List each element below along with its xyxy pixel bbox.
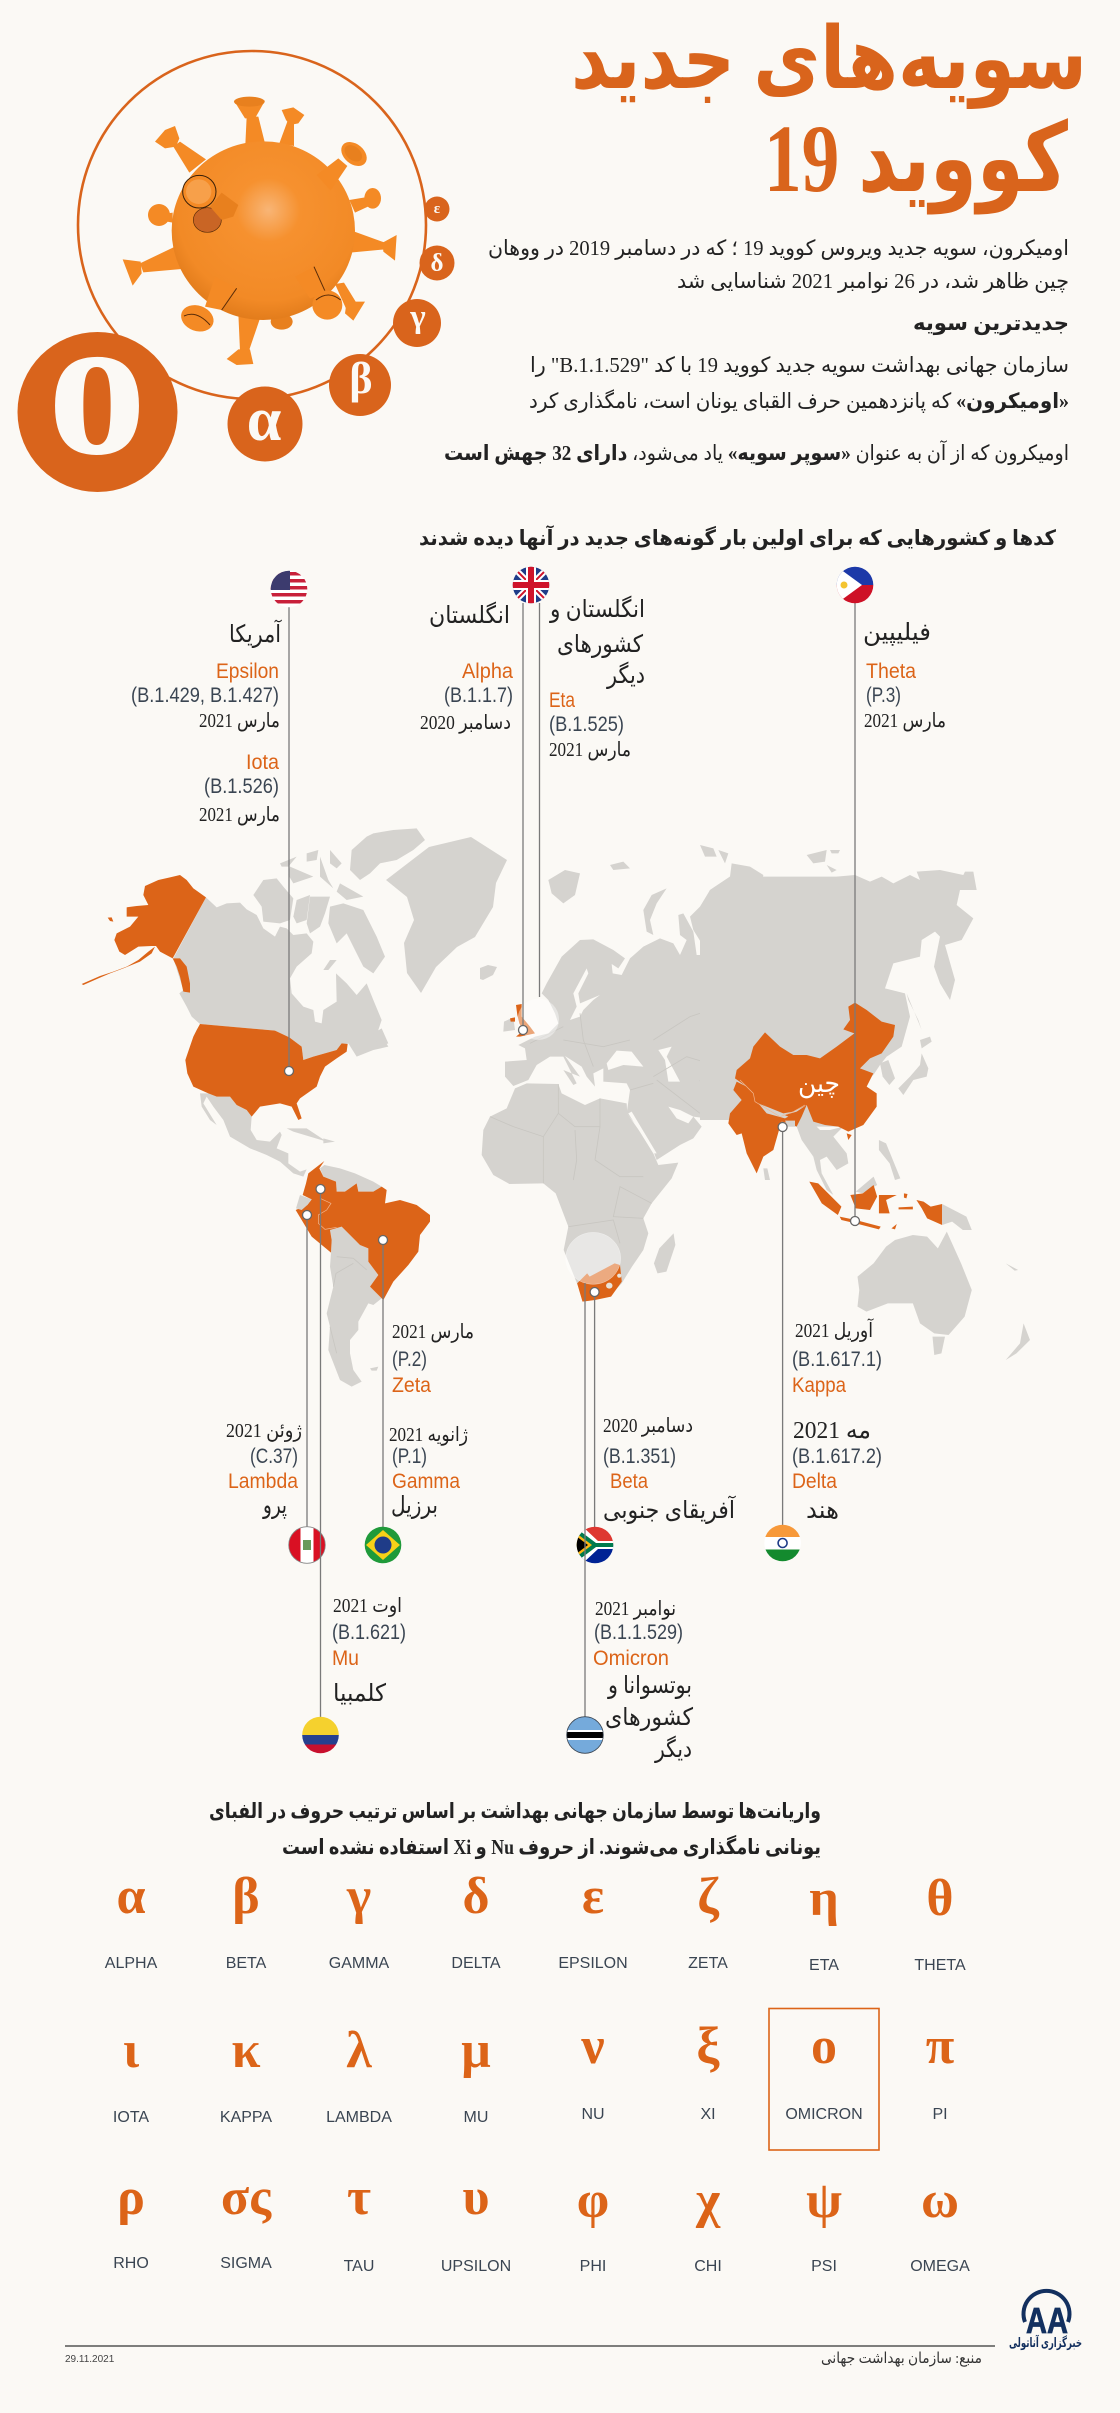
callout: Philippines: (P.3): [866, 684, 901, 707]
row 2 letters: PI: [932, 2106, 948, 2123]
row 1 letters: α: [116, 1868, 146, 1925]
callout: Brazil: ژانویه 2021: [389, 1424, 468, 1446]
intro text block: جدیدترین سویه: [913, 311, 1069, 335]
greek alphabet grid: [105, 1868, 970, 2275]
callout: South Africa: آفریقای جنوبی: [603, 1495, 736, 1524]
row 2 letters: ξ: [696, 2018, 720, 2075]
callout: Botswana: Omicron: [593, 1647, 669, 1670]
row 1 letters: δ: [462, 1868, 490, 1925]
callout: United States: مارس 2021: [199, 710, 280, 732]
callout: Philippines: فیلیپین: [863, 620, 931, 646]
callout: India: هند: [806, 1498, 839, 1524]
callout: India: (B.1.617.1): [792, 1348, 882, 1371]
callout: United States: (B.1.429, B.1.427): [131, 684, 279, 707]
naming note: یونانی نامگذاری می‌شوند. از حروف Nu و Xi استفاده نشده است: [282, 1834, 821, 1859]
callout: Botswana: (B.1.1.529): [594, 1621, 683, 1644]
row 1 letters: DELTA: [451, 1955, 501, 1972]
row 2 letters: ι: [123, 2022, 139, 2079]
footer: منبع: سازمان بهداشت جهانی: [821, 2351, 982, 2367]
title: [571, 11, 1087, 215]
callout: England: Eta: [549, 689, 575, 712]
logo: Anadolu Agency: AA: [1026, 2300, 1068, 2341]
callout: Brazil: برزیل: [391, 1493, 438, 1519]
callout: Brazil: مارس 2021: [392, 1321, 474, 1343]
badge: epsilon: ε: [434, 201, 441, 217]
logo: Anadolu Agency: خبرگزاری آناتولی: [1009, 2334, 1082, 2350]
world map: [82, 828, 1030, 1387]
row 3 letters: ω: [921, 2172, 959, 2229]
row 3 letters: [113, 2169, 970, 2275]
intro text block: چین ظاهر شد، در 26 نوامبر 2021 شناسایی شد: [677, 269, 1069, 293]
row 3 letters: OMEGA: [910, 2258, 970, 2275]
row 2 letters: MU: [464, 2109, 488, 2126]
row 2 letters: ν: [580, 2018, 605, 2075]
map heading: کدها و کشورهایی که برای اولین بار گونه‌های جدید در آنها دیده شدند: [419, 525, 1057, 550]
callout: England: دسامبر 2020: [420, 712, 511, 734]
callout: Botswana: بوتسوانا و: [607, 1673, 692, 1699]
callout: United States: (B.1.526): [204, 775, 279, 798]
badge: beta: β: [349, 354, 373, 403]
flag: Brazil: [364, 1526, 402, 1564]
callout: England: انگلستان: [429, 601, 510, 629]
row 2 letters: ο: [811, 2018, 837, 2075]
callout: United States: مارس 2021: [199, 804, 280, 826]
callout: India: [764, 1122, 882, 1562]
badge: epsilon: [424, 196, 450, 222]
callout: India: (B.1.617.2): [792, 1445, 882, 1468]
callout: Brazil: Zeta: [392, 1374, 431, 1397]
row 3 letters: PSI: [811, 2258, 837, 2275]
callout: South Africa: دسامبر 2020: [603, 1415, 693, 1437]
callout: United States: Iota: [246, 751, 279, 774]
callout: Botswana: دیگر: [654, 1735, 692, 1763]
logo: Anadolu Agency: [1009, 2291, 1082, 2350]
row 1 letters: β: [232, 1868, 260, 1925]
callout: Peru: Lambda: [228, 1470, 298, 1493]
map: Southern Africa, South-East Asia and Oceania: [566, 1140, 1030, 1360]
row 1 letters: θ: [926, 1870, 954, 1927]
callout: India: آوریل 2021: [795, 1317, 874, 1342]
badge: omicron: [18, 272, 178, 498]
callout: Brazil: Gamma: [392, 1470, 460, 1493]
row 3 letters: χ: [695, 2172, 721, 2229]
row 3 letters: υ: [462, 2169, 490, 2226]
row 3 letters: UPSILON: [441, 2258, 511, 2275]
badge: gamma: γ: [409, 299, 426, 335]
row 3 letters: RHO: [113, 2255, 149, 2272]
row 1 letters: ALPHA: [105, 1955, 158, 1972]
callout: England: مارس 2021: [549, 739, 631, 761]
callout: Philippines: مارس 2021: [864, 710, 946, 732]
callout: Brazil: [364, 1236, 474, 1564]
row 2 letters: μ: [461, 2022, 491, 2079]
naming note: [209, 1799, 821, 1859]
callout: Colombia: کلمبیا: [333, 1681, 387, 1707]
footer: 29.11.2021: [65, 2354, 115, 2365]
intro text block: اومیکرون که از آن به عنوان «سوپر سویه» یاد می‌شود، دارای 32 جهش است: [444, 440, 1069, 465]
badge: beta: [329, 354, 391, 416]
row 3 letters: ψ: [806, 2172, 842, 2229]
flag: United Kingdom: [512, 566, 550, 604]
callout: England: Alpha: [462, 660, 513, 683]
callout: United States: آمریکا: [229, 619, 282, 648]
footer: [65, 2346, 995, 2367]
map: India, Nepal and Bangladesh: [728, 1080, 807, 1173]
callout: India: Delta: [792, 1470, 837, 1493]
badge: delta: [420, 246, 454, 280]
map: South America: [296, 1161, 430, 1387]
row 2 letters: λ: [346, 2022, 372, 2079]
flag: India: [764, 1524, 802, 1562]
map: North America: [82, 828, 425, 1177]
badge: gamma: [393, 299, 441, 347]
callout: United States: [131, 570, 308, 1076]
row 2 letters: OMICRON: [785, 2106, 863, 2123]
callout: England: (B.1.1.7): [444, 684, 513, 707]
highlighted omicron box: [769, 2008, 879, 2150]
flag: Botswana: [567, 1717, 603, 1753]
row 3 letters: ρ: [117, 2169, 145, 2226]
callout: England: (B.1.525): [549, 713, 624, 736]
row 3 letters: τ: [347, 2169, 371, 2226]
callout: India: مه 2021: [793, 1418, 871, 1444]
badge: alpha: [228, 386, 302, 462]
callout: Brazil: (P.2): [392, 1348, 427, 1371]
badge: alpha: α: [247, 386, 281, 454]
callout: India: Kappa: [792, 1374, 846, 1397]
callout: Botswana: کشورهای: [605, 1705, 694, 1731]
flag: South Africa: [576, 1526, 614, 1564]
row 3 letters: SIGMA: [220, 2255, 272, 2272]
intro text block: «اومیکرون» که پانزدهمین حرف القبای یونان است، نامگذاری کرد: [529, 389, 1069, 413]
icon: orange virus: [123, 97, 397, 365]
callout: England: [420, 566, 645, 1034]
row 1 letters: ZETA: [688, 1955, 728, 1972]
callout: Philippines: [836, 566, 946, 1226]
intro text block: اومیکرون، سویه جدید ویروس کووید 19 ؛ که در دسامبر 2019 در ووهان: [488, 236, 1069, 260]
row 1 letters: THETA: [914, 1957, 966, 1974]
callout: Colombia: (B.1.621): [332, 1621, 406, 1644]
row 3 letters: φ: [577, 2172, 609, 2229]
badge: omicron: ο: [47, 272, 147, 498]
callout: South Africa: [576, 1288, 736, 1564]
callout: Philippines: Theta: [866, 660, 916, 683]
callout: South Africa: Beta: [610, 1470, 648, 1493]
row 1 letters: [105, 1868, 966, 1974]
callout: Peru: ژوئن 2021: [226, 1420, 302, 1442]
callout: Colombia: Mu: [332, 1647, 359, 1670]
row 1 letters: η: [809, 1870, 839, 1927]
row 3 letters: σς: [221, 2169, 272, 2226]
callout: Peru: (C.37): [250, 1445, 298, 1468]
map: East Asia: [700, 845, 977, 1132]
row 2 letters: XI: [700, 2106, 716, 2123]
row 2 letters: π: [926, 2018, 954, 2075]
row 2 letters: NU: [581, 2106, 605, 2123]
row 2 letters: LAMBDA: [326, 2109, 392, 2126]
row 2 letters: IOTA: [113, 2109, 149, 2126]
callout: Peru: پرو: [262, 1493, 287, 1519]
row 3 letters: TAU: [344, 2258, 374, 2275]
callout: England: کشورهای: [557, 632, 644, 658]
callout: Brazil: (P.1): [392, 1445, 427, 1468]
flag: Peru: [289, 1528, 325, 1562]
callout: England: دیگر: [606, 661, 645, 689]
callout: South Africa: (B.1.351): [603, 1445, 676, 1468]
row 1 letters: GAMMA: [329, 1955, 390, 1972]
flag: Philippines: [836, 566, 874, 604]
callout: Botswana: [566, 1283, 694, 1763]
callout: United States: Epsilon: [216, 660, 279, 683]
row 1 letters: ζ: [697, 1868, 720, 1925]
callout: England: انگلستان و: [549, 595, 645, 623]
greek letter ring illustration: [18, 51, 454, 498]
row 1 letters: ε: [582, 1868, 604, 1925]
row 1 letters: ETA: [809, 1957, 839, 1974]
map: Eurasia and Africa: [482, 862, 852, 1302]
badge: delta: δ: [431, 250, 444, 277]
row 2 letters: KAPPA: [220, 2109, 272, 2126]
callout: Colombia: [302, 1184, 406, 1754]
flag: USA: [270, 570, 308, 608]
callout: Colombia: اوت 2021: [333, 1595, 402, 1617]
row 1 letters: EPSILON: [558, 1955, 628, 1972]
callout: Botswana: نوامبر 2021: [595, 1598, 676, 1620]
flag: Colombia: [302, 1716, 340, 1754]
row 2 letters: [113, 2018, 954, 2126]
callout: Peru: [226, 1210, 326, 1564]
row 3 letters: PHI: [580, 2258, 606, 2275]
naming note: واریانت‌ها توسط سازمان جهانی بهداشت بر اساس ترتیب حروف در الفبای: [209, 1799, 821, 1823]
intro text block: [444, 236, 1069, 465]
row 3 letters: CHI: [694, 2258, 722, 2275]
row 1 letters: BETA: [226, 1955, 267, 1972]
label: China: چین: [798, 1069, 840, 1099]
row 1 letters: γ: [346, 1868, 371, 1925]
map: Greenland and Iceland: [386, 837, 507, 993]
row 2 letters: κ: [232, 2022, 261, 2079]
title: کووید 19: [764, 105, 1068, 215]
intro text block: سازمان جهانی بهداشت سویه جدید کووید 19 با کد "B.1.1.529" را: [530, 353, 1069, 377]
